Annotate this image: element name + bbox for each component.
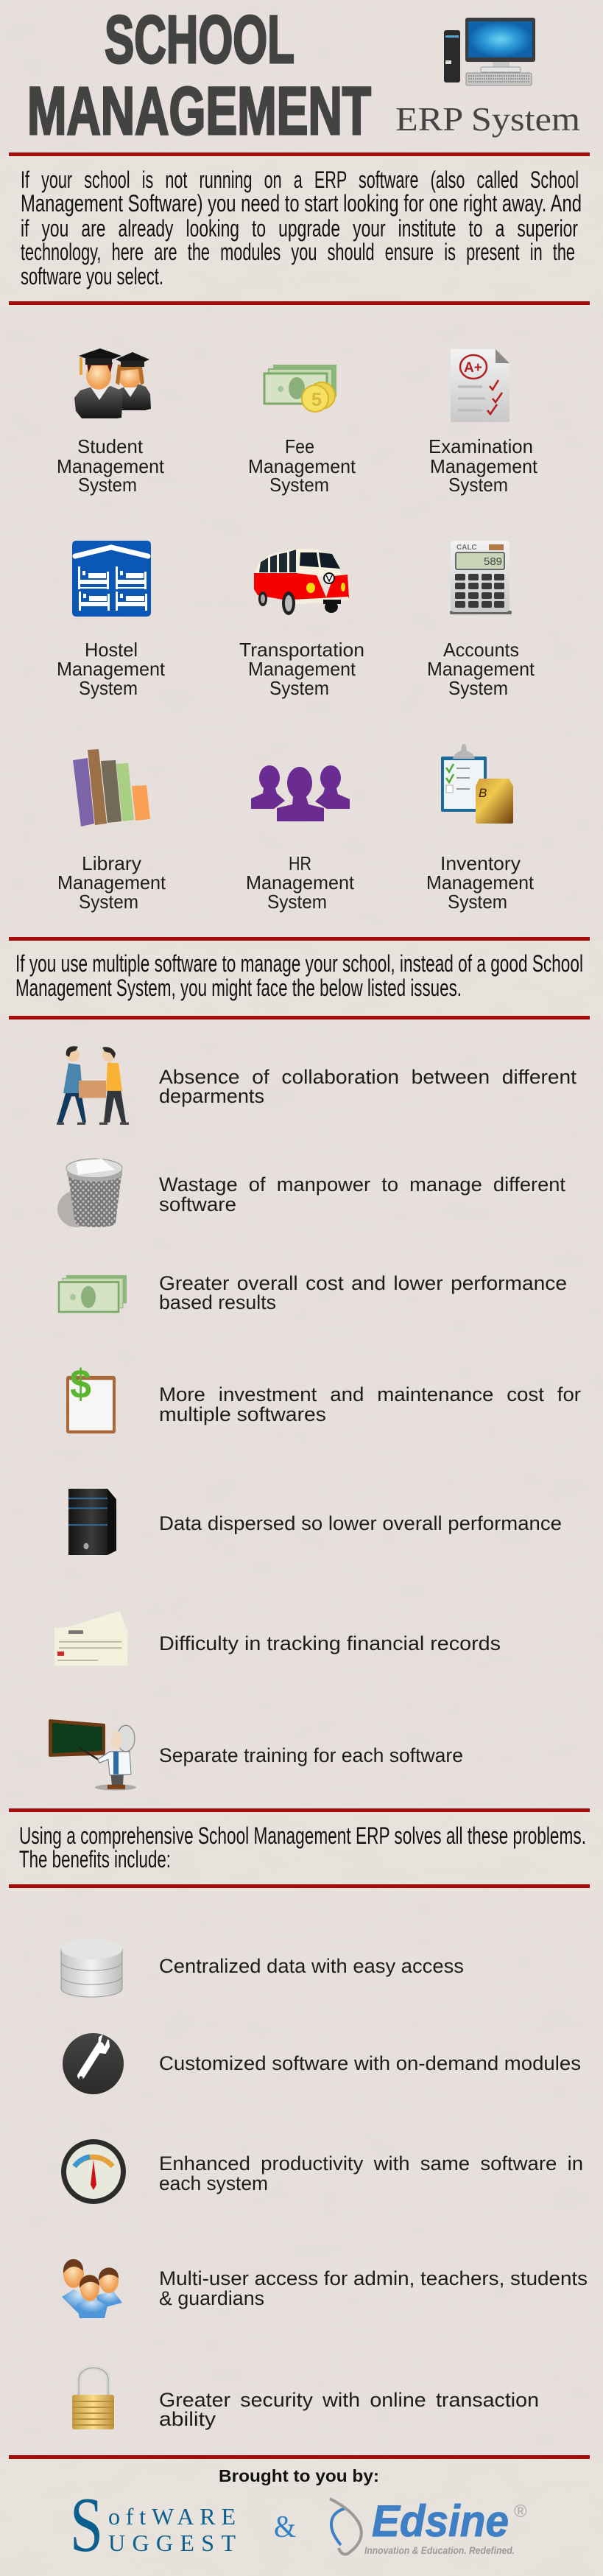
benefit: customized software xyxy=(63,2033,581,2094)
label: Management xyxy=(57,658,166,680)
heading: brought to you by: Brought to you by: xyxy=(219,2466,379,2485)
module: library management xyxy=(57,749,166,913)
issue: investment xyxy=(66,1361,581,1433)
icon: books xyxy=(73,749,150,827)
icon: desktop computer xyxy=(444,18,535,85)
label: Management xyxy=(248,455,356,477)
icon: waste bin xyxy=(57,1159,122,1227)
issue: data dispersed xyxy=(68,1489,562,1555)
issue: cost xyxy=(59,1272,567,1313)
label xyxy=(57,435,165,496)
text: multiple softwares xyxy=(159,1403,326,1425)
label: System xyxy=(78,474,137,496)
text xyxy=(159,1272,567,1313)
module: hr management xyxy=(246,765,355,913)
text: Separate training for each software xyxy=(159,1744,463,1766)
label: System xyxy=(448,474,508,496)
icon: red van xyxy=(254,549,349,615)
text: ability xyxy=(159,2408,216,2430)
text block: benefits intro xyxy=(19,1822,586,1873)
icon: clipboard with dollar xyxy=(66,1361,116,1433)
label: Management xyxy=(57,871,166,894)
issue: collaboration xyxy=(57,1046,577,1125)
icon: banknotes xyxy=(59,1275,127,1312)
text xyxy=(159,1066,577,1107)
logo: Software Suggest: oftWARE xyxy=(108,2503,236,2530)
text: More investment and maintenance cost for xyxy=(159,1383,581,1405)
icon: cheques xyxy=(54,1611,127,1666)
logo: Software Suggest xyxy=(70,2482,236,2568)
ampersand: & xyxy=(274,2510,296,2544)
subtitle: ERP System xyxy=(395,100,580,138)
title: SCHOOL xyxy=(105,2,295,77)
icon: three people silhouettes xyxy=(251,765,350,821)
label: System xyxy=(448,891,507,913)
label: Fee xyxy=(285,435,314,457)
module: fee management xyxy=(248,365,356,496)
label xyxy=(57,639,166,699)
icon: graduates xyxy=(74,348,151,418)
text xyxy=(159,2389,539,2430)
label: System xyxy=(448,677,508,699)
text: software xyxy=(159,1193,236,1215)
icon: calculator xyxy=(450,541,512,614)
module: transportation management xyxy=(239,549,364,699)
text: each system xyxy=(159,2172,268,2194)
text block: introduction xyxy=(21,166,582,289)
icon: professor at chalkboard xyxy=(49,1719,136,1791)
text: Greater overall cost and lower performance xyxy=(159,1272,567,1294)
module: accounts management xyxy=(427,541,535,699)
panel: header xyxy=(27,2,580,149)
text: Customized software with on-demand modules xyxy=(159,2052,581,2074)
label: System xyxy=(79,677,138,699)
icon: calculator: CALC xyxy=(456,544,477,552)
label xyxy=(429,435,538,496)
module: hostel management xyxy=(57,541,166,699)
text: Enhanced productivity with same software in xyxy=(159,2152,583,2175)
label: System xyxy=(267,891,327,913)
text: Multi-user access for admin, teachers, students xyxy=(159,2267,588,2289)
icon: clipboard and box: B xyxy=(479,786,487,800)
panel: benefits list xyxy=(61,1939,588,2430)
logo: Edsine: Innovation & Education. Redefined. xyxy=(364,2544,515,2556)
icon: database cylinders xyxy=(61,1939,122,1997)
label: Management xyxy=(427,658,535,680)
text: based results xyxy=(159,1291,276,1313)
icon: three users xyxy=(62,2259,122,2318)
issue: financial records xyxy=(54,1611,501,1666)
label: Management xyxy=(426,871,535,894)
text: Centralized data with easy access xyxy=(159,1955,464,1977)
label: Transportation xyxy=(239,639,364,661)
label: Library xyxy=(82,852,141,874)
label: Student xyxy=(77,435,144,457)
benefit: multi-user xyxy=(62,2259,588,2318)
label: Management xyxy=(248,658,356,680)
label: System xyxy=(79,891,138,913)
title xyxy=(27,2,371,149)
icon: two people carrying box xyxy=(57,1046,129,1125)
label xyxy=(239,639,364,699)
icon: graded paper xyxy=(451,349,509,422)
label: Accounts xyxy=(443,639,519,661)
logo: Edsine xyxy=(330,2496,527,2556)
text block: introduction: software you select. xyxy=(21,263,163,289)
label xyxy=(246,852,355,913)
logo: Software Suggest: UGGEST xyxy=(108,2530,236,2556)
text: Wastage of manpower to manage different xyxy=(159,1173,566,1196)
label: Management xyxy=(430,455,538,477)
text: Absence of collaboration between different xyxy=(159,1066,577,1088)
icon: hostel beds sign xyxy=(72,541,151,617)
title: MANAGEMENT xyxy=(27,74,371,149)
issue: manpower xyxy=(57,1159,566,1227)
benefit: security xyxy=(72,2368,539,2430)
benefit: productivity xyxy=(61,2139,583,2204)
icon: banknotes and coins xyxy=(264,365,336,412)
label xyxy=(426,852,535,913)
label: Hostel xyxy=(85,639,138,661)
logo: Edsine: Edsine xyxy=(372,2496,509,2546)
text xyxy=(159,1173,566,1215)
label: Management xyxy=(57,455,165,477)
text block: issues intro xyxy=(15,950,583,1001)
module: student management xyxy=(57,348,165,496)
label: Inventory xyxy=(440,852,521,874)
label xyxy=(248,435,356,496)
text xyxy=(159,2152,583,2194)
icon: server tower xyxy=(68,1489,116,1555)
module: examination management xyxy=(429,349,538,496)
label: HR xyxy=(289,852,311,874)
icon: clipboard and box xyxy=(441,744,513,824)
label: System xyxy=(269,474,329,496)
benefit: centralized data xyxy=(61,1939,464,1997)
text: Data dispersed so lower overall performance xyxy=(159,1512,562,1534)
icon: calculator: 589 xyxy=(484,555,502,568)
text block: benefits intro: The benefits include: xyxy=(19,1846,171,1873)
text xyxy=(159,1383,581,1425)
icon: clipboard with dollar: $ xyxy=(70,1361,91,1407)
panel: modules grid xyxy=(57,348,538,913)
icon: gauge xyxy=(61,2139,126,2204)
label: Management xyxy=(246,871,355,894)
module: inventory management xyxy=(426,744,535,913)
logo: Software Suggest: S xyxy=(70,2482,103,2568)
icon: banknotes and coins: 5 xyxy=(311,390,322,410)
text xyxy=(159,2267,588,2309)
label: System xyxy=(269,677,329,699)
logo: Edsine: ® xyxy=(514,2502,527,2521)
icon: wrench xyxy=(63,2033,124,2094)
text: Difficulty in tracking financial records xyxy=(159,1632,501,1654)
issue: training xyxy=(49,1719,463,1791)
label xyxy=(427,639,535,699)
label: Examination xyxy=(429,435,533,457)
panel: footer credits xyxy=(70,2466,527,2568)
label xyxy=(57,852,166,913)
text: deparments xyxy=(159,1085,264,1107)
panel: issues list xyxy=(49,1046,581,1791)
icon: padlock xyxy=(72,2368,114,2429)
text: Greater security with online transaction xyxy=(159,2389,539,2411)
icon: graded paper: A+ xyxy=(464,360,482,376)
text: & guardians xyxy=(159,2287,264,2309)
